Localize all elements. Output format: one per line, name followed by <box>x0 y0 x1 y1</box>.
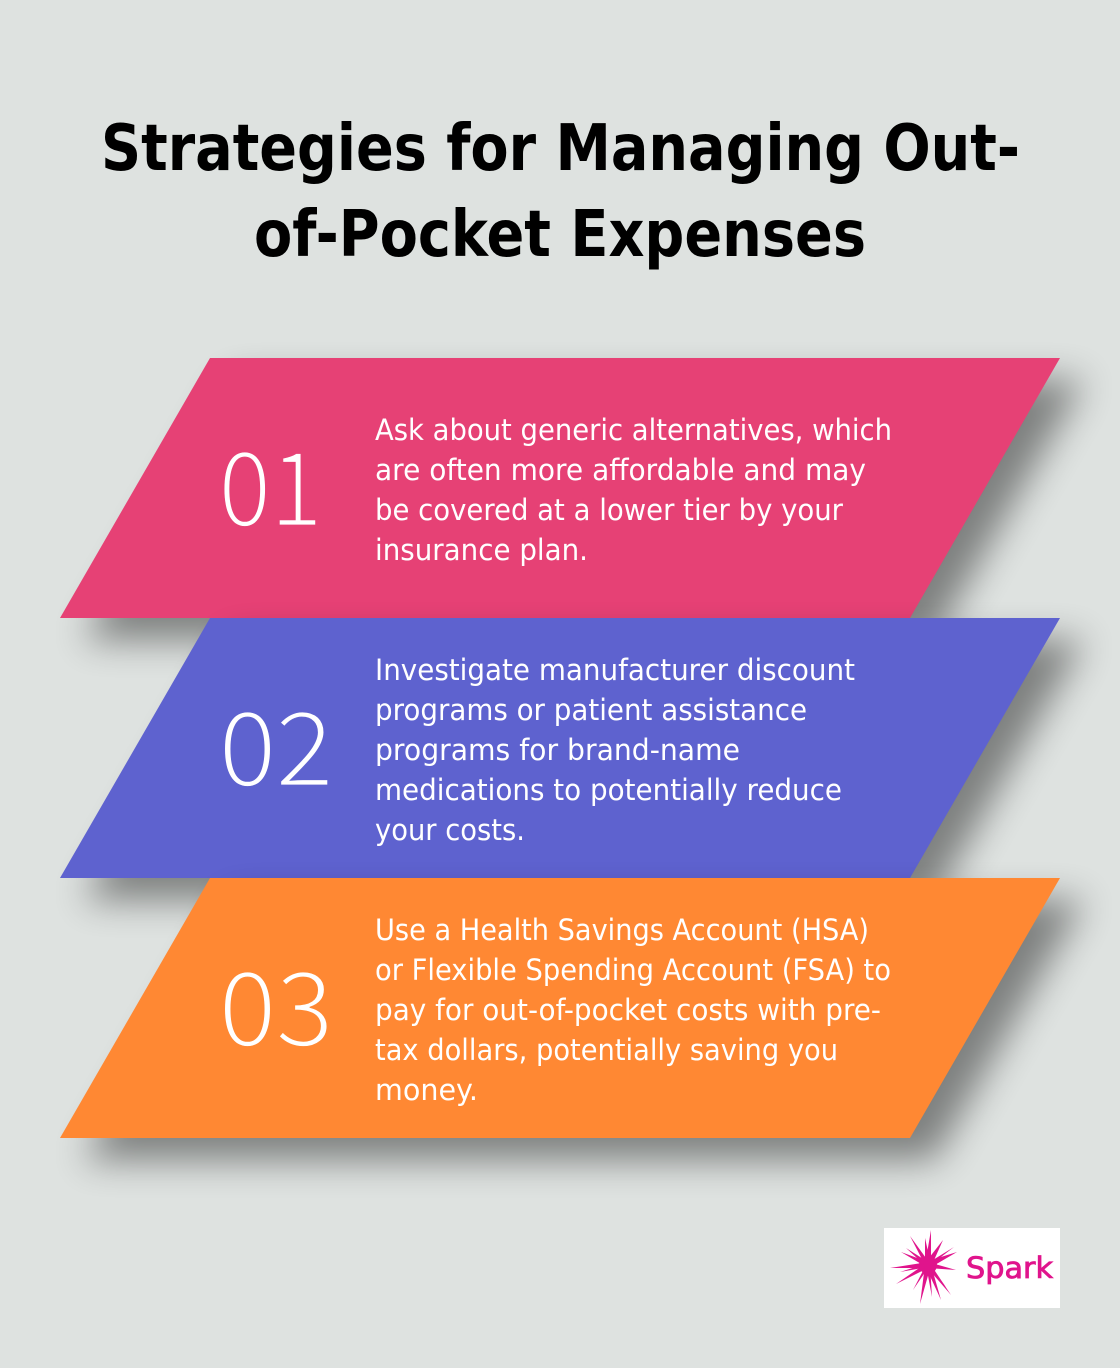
panel: step 02 <box>60 618 1084 900</box>
text: step 02 <box>375 653 855 847</box>
panel: step 01 <box>60 358 1084 640</box>
text: step 01: insurance plan. <box>375 533 588 567</box>
text: step 02: your costs. <box>375 813 525 847</box>
text: step 02: programs for brand-name <box>375 733 740 767</box>
number 02: 02 <box>219 669 333 815</box>
text: step 01: be covered at a lower tier by your <box>375 493 844 527</box>
number 01: 01 <box>219 409 322 555</box>
text: step 02: programs or patient assistance <box>375 693 807 727</box>
text: step 02: medications to potentially reduce <box>375 773 842 807</box>
text: step 03: pay for out-of-pocket costs with pre- <box>375 993 881 1027</box>
text: step 01 <box>375 413 892 567</box>
text: step 02: Investigate manufacturer discount <box>375 653 855 687</box>
panel: step 03 <box>60 878 1084 1160</box>
text: step 03: or Flexible Spending Account (FSA) to <box>375 953 891 987</box>
text: step 03 <box>375 913 891 1107</box>
title: of-Pocket Expenses <box>254 198 866 272</box>
text: step 03: tax dollars, potentially saving you <box>375 1033 838 1067</box>
icon: starburst <box>890 1230 957 1304</box>
text: step 01: are often more affordable and may <box>375 453 866 487</box>
title <box>101 112 1020 272</box>
text: step 01: Ask about generic alternatives, which <box>375 413 892 447</box>
logo: Spark <box>884 1228 1060 1308</box>
text: step 03: Use a Health Savings Account (HSA) <box>375 913 869 947</box>
text: step 03: money. <box>375 1073 478 1107</box>
logo wordmark: Spark <box>966 1251 1053 1285</box>
number 03: 03 <box>219 929 333 1075</box>
